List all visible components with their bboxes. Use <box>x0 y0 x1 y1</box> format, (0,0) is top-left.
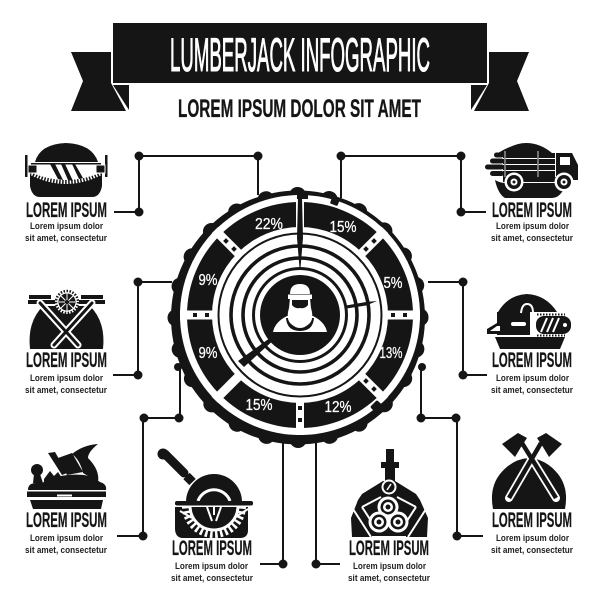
label: bottom center right <box>348 537 430 583</box>
gap markers <box>193 193 407 422</box>
central tree ring chart <box>171 190 425 444</box>
label: bottom right: Lorem ipsum dolor <box>496 533 569 543</box>
label: bottom left: Lorem ipsum dolor <box>30 533 103 543</box>
percentage labels: 15% <box>246 397 272 414</box>
subtitle: LOREM IPSUM DOLOR SIT AMET <box>178 95 421 123</box>
label: middle left: sit amet, consectetur <box>25 385 107 395</box>
label: bottom center right: LOREM IPSUM <box>349 537 429 560</box>
label: top left: sit amet, consectetur <box>25 233 107 243</box>
label: middle left: LOREM IPSUM <box>26 349 107 372</box>
label: top right: Lorem ipsum dolor <box>496 221 569 231</box>
label: top left: Lorem ipsum dolor <box>30 221 103 231</box>
icon: crossed axes <box>492 433 566 509</box>
percentage labels: 5% <box>384 275 402 292</box>
label: middle right: sit amet, consectetur <box>491 385 573 395</box>
percentage segments <box>180 195 420 435</box>
label: bottom left: sit amet, consectetur <box>25 545 107 555</box>
scalloped bark <box>171 190 425 444</box>
icon: chainsaw <box>487 294 574 349</box>
label: bottom left <box>25 509 107 555</box>
label: middle right <box>491 349 573 395</box>
icon: logging truck <box>485 143 578 198</box>
icon: wood plane <box>27 444 106 509</box>
percentage labels: 12% <box>324 399 352 416</box>
label: top right <box>491 199 573 243</box>
label: bottom right: sit amet, consectetur <box>491 545 573 555</box>
icon: two-man saw <box>25 143 108 197</box>
label: bottom right <box>491 509 573 555</box>
label: bottom center left <box>171 537 253 583</box>
icon: circular saw <box>158 448 253 538</box>
label: middle left: Lorem ipsum dolor <box>30 373 103 383</box>
label: bottom center right: sit amet, consectetur <box>348 573 430 583</box>
label: bottom center left: sit amet, consectetur <box>171 573 253 583</box>
label: middle right: Lorem ipsum dolor <box>496 373 569 383</box>
label: bottom center left: Lorem ipsum dolor <box>175 561 248 571</box>
label: bottom center right: Lorem ipsum dolor <box>353 561 426 571</box>
lumberjack portrait <box>260 275 340 355</box>
percentage labels: 15% <box>330 219 356 236</box>
white sapwood ring <box>180 195 420 435</box>
title banner <box>71 23 529 111</box>
label: bottom left: LOREM IPSUM <box>26 509 107 532</box>
label: top right: sit amet, consectetur <box>491 233 573 243</box>
percentage labels: 9% <box>198 345 218 362</box>
label: top left <box>25 199 107 243</box>
percentage labels <box>198 216 402 416</box>
percentage labels: 22% <box>255 216 283 233</box>
percentage labels: 9% <box>198 272 218 289</box>
annual rings <box>218 234 382 396</box>
label: bottom center left: LOREM IPSUM <box>172 537 252 560</box>
label: middle left <box>25 349 107 395</box>
percentage labels: 13% <box>380 345 402 362</box>
label: top left: LOREM IPSUM <box>26 199 107 222</box>
icon: log grapple <box>351 449 428 537</box>
icon: crossed tools and gear <box>28 290 105 349</box>
wood cracks <box>238 198 377 367</box>
connector lines <box>113 152 487 568</box>
